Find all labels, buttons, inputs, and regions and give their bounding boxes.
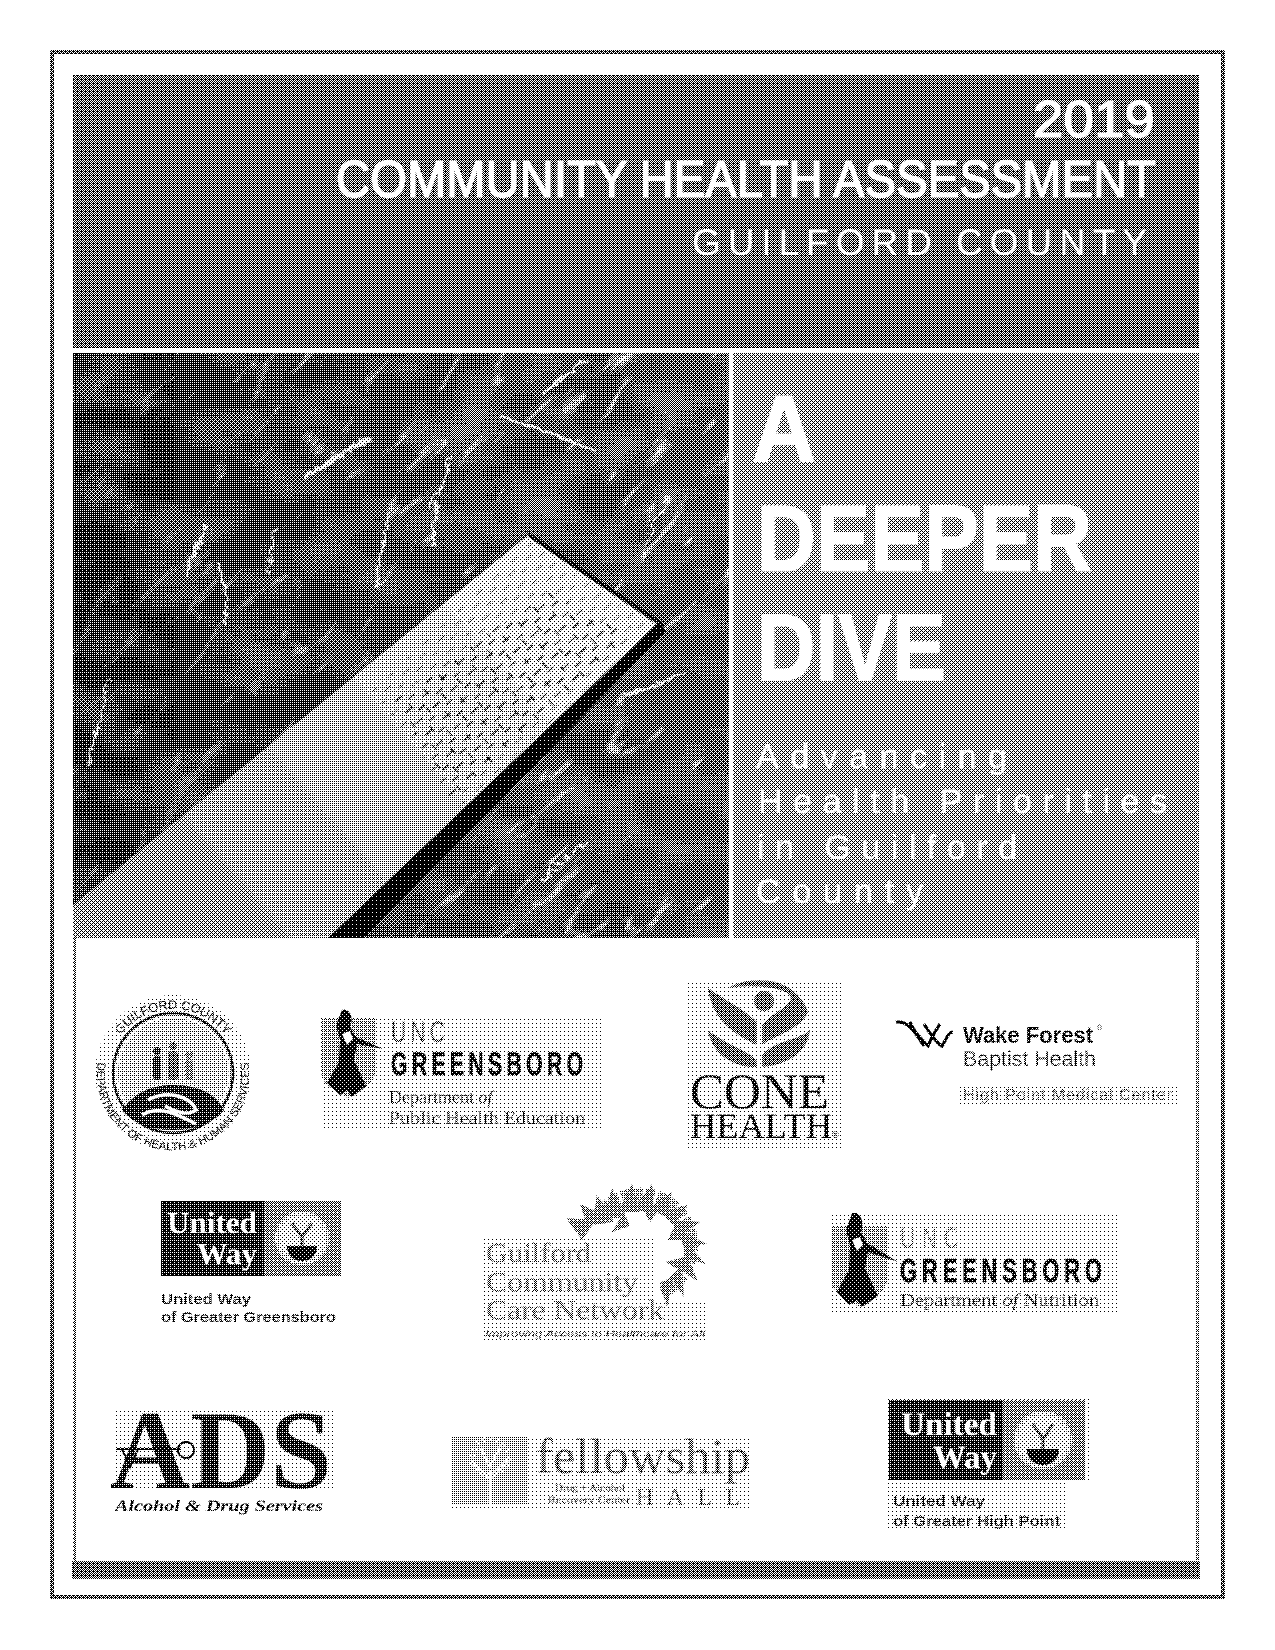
logo: fellowship hall: Recovery Center: [548, 1495, 630, 1505]
logo: unc greensboro public health education: Department of: [389, 1087, 495, 1107]
logo section frame: [73, 938, 1199, 1561]
logo: unc greensboro public health education: GREENSBORO: [391, 1045, 583, 1082]
logo: united way of greater high point: [888, 1397, 1090, 1530]
logo: unc greensboro public health education: Public Health Education: [389, 1108, 585, 1128]
header banner: [73, 75, 1199, 348]
logo: wake forest baptist health: High Point Medical Center: [963, 1087, 1173, 1104]
subheading: advancing health priorities: County: [756, 873, 923, 911]
title: year: 2019: [1033, 91, 1155, 149]
wake forest wave icon: [896, 1022, 953, 1046]
subheading: advancing health priorities: [756, 738, 1167, 911]
logo: unc greensboro nutrition: UNC: [900, 1223, 959, 1255]
seal hands on hill: [122, 1085, 224, 1130]
shield with figure: [321, 1018, 375, 1098]
united way emblem: [1014, 1411, 1072, 1469]
logo: unc greensboro nutrition: [830, 1213, 1117, 1315]
footer bar: [72, 1561, 1200, 1579]
logo: cone health: [685, 980, 842, 1149]
logo: guilford county health and human services seal: [94, 995, 252, 1153]
logo: fellowship hall: HALL: [636, 1485, 740, 1511]
board tread marks: [372, 540, 650, 812]
logo: united way of greater greensboro: of Greater Greensboro: [161, 1309, 336, 1326]
logo: alcohol and drug services: Alcohol & Drug Services: [114, 1498, 323, 1515]
sunburst ring: [566, 1184, 707, 1307]
logo: united way of greater high point: United: [901, 1407, 997, 1443]
title: community health assessment: COMMUNITY HEALTH ASSESSMENT: [336, 151, 1156, 209]
heading: a deeper dive: DIVE: [757, 595, 946, 701]
logo: guilford community care network: [484, 1184, 707, 1340]
logo: united way of greater high point: of Greater High Point: [893, 1513, 1060, 1530]
logo: guilford community care network: Care Network: [486, 1295, 665, 1325]
photo: diving board over water: [73, 353, 729, 938]
logo: fellowship hall: fellowship: [536, 1428, 750, 1484]
subheading: advancing health priorities: Advancing: [756, 738, 1007, 776]
logo: cone health: HEALTH: [690, 1106, 832, 1146]
logo: alcohol and drug services: ADS: [110, 1389, 332, 1513]
logo: guilford community care network: Community: [486, 1267, 639, 1297]
diving board shadow: [326, 622, 666, 940]
logo: unc greensboro public health education: UNC: [391, 1017, 445, 1049]
logo: wake forest baptist health: Baptist Health: [963, 1048, 1096, 1071]
united way emblem: [275, 1211, 329, 1265]
right title panel: [733, 353, 1199, 938]
subtitle: county: GUILFORD COUNTY: [692, 222, 1147, 263]
logo: united way of greater high point: United Way: [893, 1493, 986, 1510]
logo: guilford community care network: Improving Access to Healthcare for All: [485, 1329, 706, 1339]
ads hands emblem: [116, 1442, 194, 1467]
logo: fellowship hall: Drug + Alcohol: [555, 1483, 626, 1493]
logo: wake forest baptist health: [896, 1022, 1180, 1105]
logo: guilford county health and human services seal: DEPARTMENT OF HEALTH & HUMAN SERVICES: [97, 1063, 249, 1150]
logo: wake forest baptist health: Wake Forest: [963, 1022, 1093, 1048]
logo: guilford community care network: Guilford: [486, 1238, 592, 1268]
seal ring text: GUILFORD COUNTY: [116, 1000, 232, 1033]
subheading: advancing health priorities: Health Priorities: [758, 783, 1167, 821]
heading: a deeper dive: A: [752, 376, 816, 482]
heading: a deeper dive: DEEPER: [757, 486, 1092, 592]
logo: wake forest baptist health: ®: [1097, 1024, 1103, 1032]
logo: unc greensboro nutrition: GREENSBORO: [900, 1252, 1102, 1289]
seal figures: [153, 1042, 193, 1080]
logo: unc greensboro nutrition: Department of Nutrition: [900, 1290, 1099, 1310]
logo: united way of greater greensboro: Way: [197, 1236, 257, 1271]
logo: united way of greater greensboro: [161, 1201, 341, 1326]
subheading: advancing health priorities: in Guilford: [757, 829, 1017, 867]
logo: fellowship hall: [452, 1428, 752, 1511]
logo: cone health: ®: [832, 1130, 839, 1140]
cone health flower icon: [708, 980, 810, 1067]
logo: united way of greater greensboro: United: [167, 1205, 257, 1240]
logo: united way of greater high point: Way: [933, 1440, 997, 1476]
diving board: [73, 536, 656, 940]
logo: cone health: CONE: [690, 1063, 829, 1119]
logo: united way of greater greensboro: United Way: [161, 1291, 252, 1308]
shield with figure: [831, 1226, 887, 1307]
tree box: [452, 1437, 527, 1505]
logo: unc greensboro public health education: [321, 1010, 604, 1130]
heading: a deeper dive: [752, 376, 1092, 701]
